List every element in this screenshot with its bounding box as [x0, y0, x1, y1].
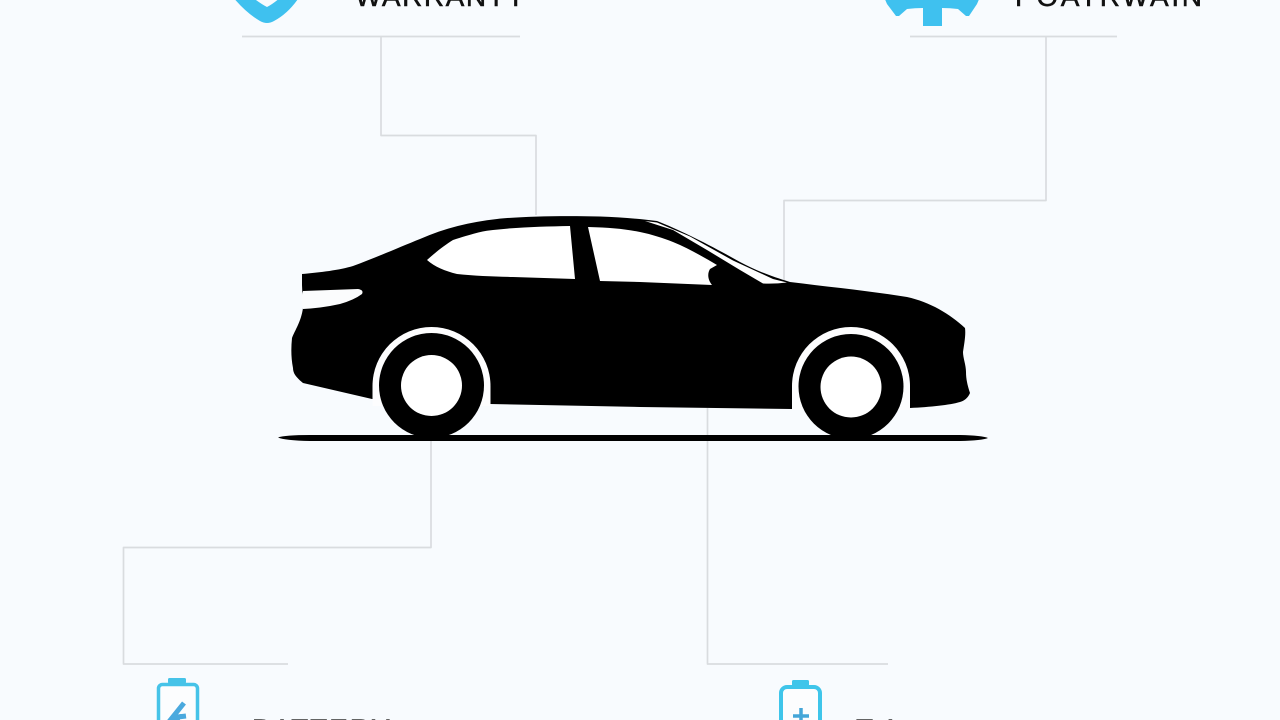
car body	[291, 216, 970, 409]
connector: tax to car	[708, 408, 888, 664]
icon: battery with bolt	[158, 678, 198, 720]
connector: warranty to car	[242, 36, 536, 215]
windshield highlight	[645, 221, 787, 284]
icon: warranty shield	[232, 0, 300, 23]
front window	[588, 227, 717, 285]
rear window	[427, 226, 575, 279]
front wheel	[792, 327, 910, 439]
tail light	[302, 289, 362, 309]
rear wheel	[372, 327, 490, 438]
connector: battery to car	[124, 438, 431, 664]
car silhouette	[278, 216, 988, 441]
ground shadow	[278, 435, 988, 441]
icon: powertrain gear	[884, 0, 980, 26]
icon: battery with plus	[781, 680, 820, 720]
connector: powertrain to car	[784, 36, 1117, 282]
